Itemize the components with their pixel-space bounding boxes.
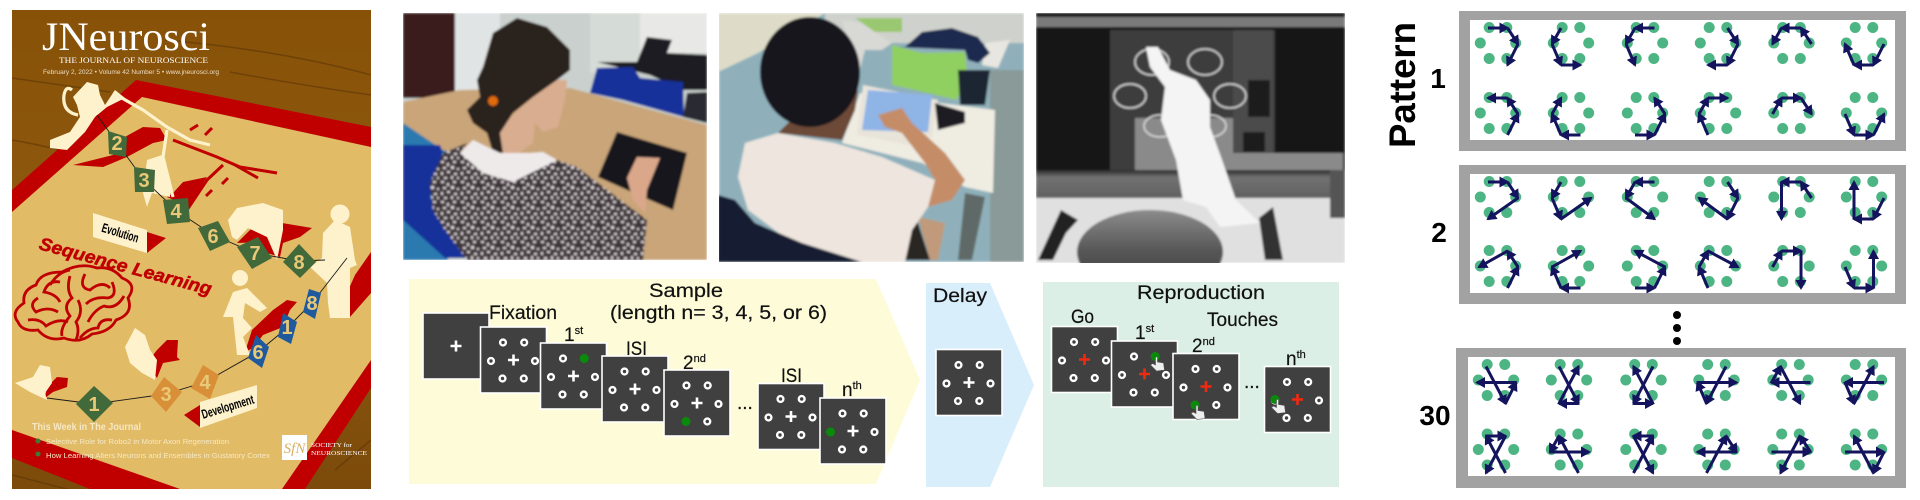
society logo: SfN	[284, 441, 306, 457]
panel: pattern 1	[1459, 11, 1906, 151]
game board surface	[12, 97, 371, 489]
screen: ISI	[602, 356, 668, 422]
development number tiles: 8	[306, 293, 318, 315]
label: nth touch: th	[1297, 349, 1306, 361]
label: second touch: 2	[1192, 336, 1203, 357]
society logo: SOCIETY for	[311, 442, 353, 449]
society logo: NEUROSCIENCE	[311, 450, 367, 457]
vertical ellipsis	[1673, 311, 1681, 345]
screen: first touch	[1112, 341, 1178, 407]
screen: targets	[480, 327, 546, 393]
photo: monkey touching screen	[1036, 13, 1345, 263]
development number tiles: 1	[281, 317, 293, 339]
development number tiles: 1	[88, 394, 100, 416]
screen: nth item	[820, 398, 886, 464]
screen: first item	[540, 343, 606, 409]
label: touches: Touches	[1207, 310, 1278, 331]
panel: journal cover	[12, 10, 371, 495]
sample heading: Sample	[649, 281, 723, 302]
evolution number tiles: 2	[111, 133, 123, 155]
screen: ISI second	[758, 384, 824, 450]
cover silhouettes: development	[15, 270, 297, 400]
screen: second item	[664, 370, 730, 436]
photo: child using tablet	[718, 13, 1024, 262]
brain icon	[15, 266, 132, 340]
evolution label	[93, 213, 166, 253]
sequence strings	[47, 115, 347, 404]
panel: pattern 2	[1459, 165, 1906, 304]
label: nth: th	[853, 380, 862, 392]
screen: fixation	[423, 313, 489, 379]
development number tiles: 4	[199, 372, 211, 394]
development number tiles	[76, 289, 321, 422]
label: nth touch: n	[1286, 349, 1297, 370]
wood background	[12, 10, 371, 489]
sample length note: (length n= 3, 4, 5, or 6)	[610, 303, 827, 324]
development number tiles: 6	[252, 342, 264, 364]
label: second touch: nd	[1203, 336, 1215, 348]
cover masthead	[42, 23, 219, 76]
game board border	[12, 80, 371, 489]
label: pattern 1: 1	[1430, 63, 1446, 94]
panel: pattern 30	[1456, 348, 1906, 488]
panel: reproduction phase	[1043, 282, 1339, 487]
label: first touch: st	[1146, 323, 1154, 335]
screen: delay	[936, 350, 1002, 416]
heading: pattern: Pattern	[1382, 22, 1423, 148]
panel: sample phase	[409, 279, 920, 484]
sample arrow background	[409, 279, 920, 484]
society logo	[282, 435, 367, 460]
cover silhouettes: evolution	[50, 82, 371, 318]
this week in the journal	[32, 422, 270, 460]
ellipsis: ...	[1244, 372, 1260, 393]
this week in the journal: Selective Role for Robo2 in Motor Axon Regeneration	[46, 437, 229, 446]
screen: nth touch	[1264, 366, 1330, 432]
delay arrow background	[926, 283, 1034, 487]
development number tiles: 3	[160, 384, 172, 406]
label: ISI second: ISI	[781, 366, 802, 387]
cover masthead: JNeurosci	[42, 14, 210, 59]
label: first: 1	[564, 325, 575, 346]
cover masthead: February 2, 2022 • Volume 42 Number 5 • www.jneurosci.org	[43, 69, 219, 76]
reproduction heading: Reproduction	[1137, 283, 1265, 304]
panel: delay phase	[926, 283, 1034, 487]
evolution label: Evolution	[100, 220, 141, 245]
evolution number tiles: 3	[138, 170, 150, 192]
this week in the journal: This Week in The Journal	[32, 422, 141, 433]
reproduction background	[1043, 282, 1339, 487]
evolution number tiles: 4	[170, 201, 182, 223]
label: ISI: ISI	[626, 339, 647, 360]
development label	[184, 385, 257, 428]
screen: second touch	[1173, 354, 1239, 420]
evolution number tiles: 8	[293, 252, 305, 274]
evolution number tiles	[108, 131, 316, 278]
label: pattern 2: 2	[1431, 217, 1447, 248]
evolution number tiles: 7	[249, 243, 261, 265]
evolution number tiles: 6	[207, 226, 219, 248]
label: second: nd	[694, 353, 706, 365]
development label: Development	[200, 392, 256, 422]
screen: go	[1052, 326, 1118, 392]
label: first touch: 1	[1135, 323, 1146, 344]
label: nth: n	[842, 380, 853, 401]
label: first: st	[575, 325, 583, 337]
photo: woman using tablet	[403, 13, 707, 260]
label: go: Go	[1071, 307, 1094, 328]
label: pattern 30: 30	[1419, 400, 1451, 431]
label: second: 2	[683, 353, 694, 374]
this week in the journal: How Learning Alters Neurons and Ensembles in Gustatory Cortex	[46, 451, 270, 460]
delay heading: Delay	[933, 286, 988, 307]
sequence learning heading: Sequence Learning	[37, 234, 214, 299]
label: fixation: Fixation	[489, 303, 557, 324]
cover masthead: THE JOURNAL OF NEUROSCIENCE	[59, 55, 208, 65]
ellipsis: ...	[737, 393, 753, 414]
